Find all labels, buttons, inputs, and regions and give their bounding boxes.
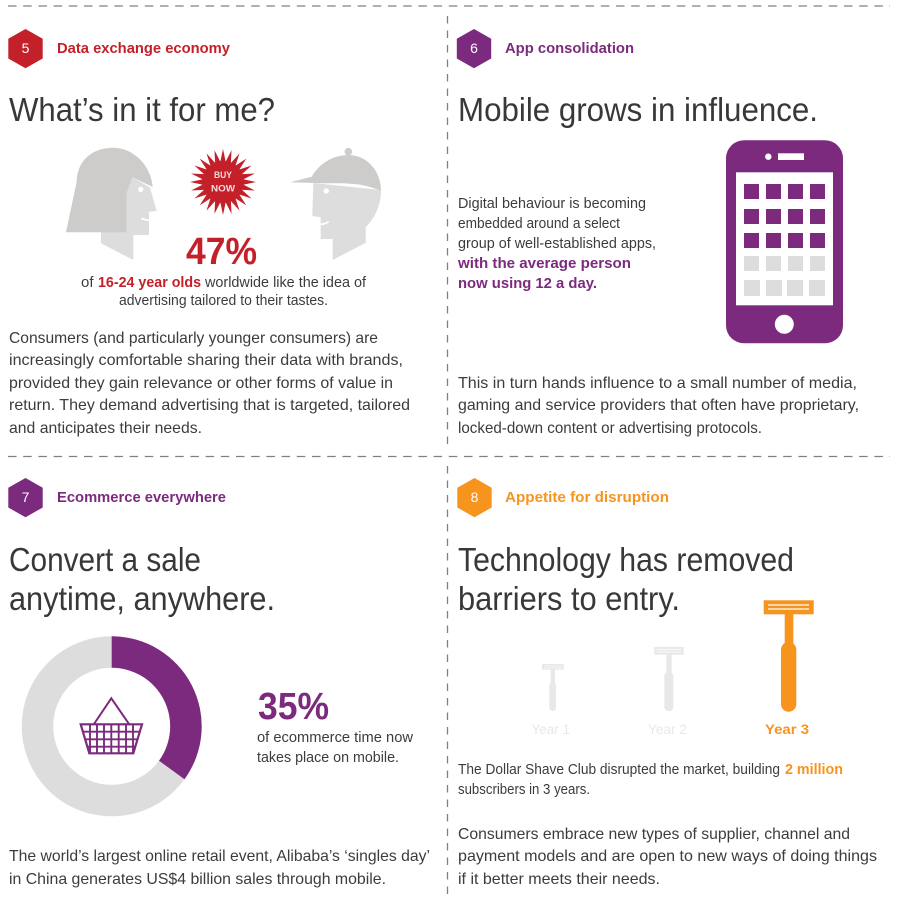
heading: technology has removed barriers: Technology has removed (458, 541, 794, 578)
panel: app consolidation (457, 29, 859, 437)
icon: razor year 2 (654, 647, 684, 711)
text block: alibaba singles day (9, 848, 430, 888)
caption: ecommerce time: of ecommerce time now (257, 729, 413, 746)
text block: dollar shave club: subscribers in 3 years. (458, 781, 590, 798)
icon: shopping basket (81, 698, 142, 753)
icon: hexagon number 7 (8, 478, 43, 517)
text block: consumers: Consumers (and particularly younger consumers) are (9, 330, 378, 347)
panel label: ecommerce everywhere: Ecommerce everywhere (57, 490, 226, 506)
text block: alibaba singles day: in China generates US$4 billion sales through mobile. (9, 871, 386, 888)
text block: dollar shave club (458, 761, 843, 798)
icon: buy now starburst: NOW (211, 184, 235, 194)
heading: mobile grows in influence: Mobile grows in influence. (458, 91, 818, 128)
statistic: 47%: 47% (186, 231, 257, 273)
text block: new models: if it better meets their needs. (458, 871, 660, 888)
text block: new models: Consumers embrace new types of supplier, channel and (458, 826, 850, 843)
icon: razor year 3 (764, 600, 814, 712)
text block: consumers: and anticipates their needs. (9, 420, 202, 437)
caption: 16-24 year olds: advertising tailored to their tastes. (119, 292, 328, 309)
label: year 2: Year 2 (648, 721, 687, 737)
text block: new models: payment models and are open to new ways of doing things (458, 848, 877, 865)
panel: data exchange economy (8, 29, 410, 437)
caption: ecommerce time (257, 729, 413, 766)
text block: digital behaviour: embedded around a select (458, 215, 621, 232)
panel label: app consolidation: App consolidation (505, 41, 634, 57)
icon: hexagon number 7: 7 (22, 489, 30, 505)
text block: influence: gaming and service providers that often have proprietary, (458, 397, 859, 414)
heading: convert a sale: anytime, anywhere. (9, 580, 275, 617)
heading: technology has removed barriers: barriers to entry. (458, 580, 680, 617)
caption: 16-24 year olds (81, 274, 367, 309)
chart: donut 35% (37, 636, 202, 801)
text block: digital behaviour: with the average person (457, 255, 631, 272)
heading: convert a sale (9, 541, 275, 617)
icon: hexagon number 6: 6 (470, 40, 478, 56)
panel label: data exchange economy: Data exchange economy (57, 41, 230, 57)
icon: hexagon number 5 (8, 29, 43, 68)
panel: ecommerce everywhere (8, 478, 430, 888)
text block: influence (458, 375, 859, 437)
panel label: appetite for disruption: Appetite for disruption (505, 490, 669, 506)
caption: 16-24 year olds: of (81, 274, 94, 291)
text block: consumers: increasingly comfortable sharing their data with brands, (9, 352, 403, 369)
panel: appetite for disruption (457, 478, 877, 888)
caption: 16-24 year olds: worldwide like the idea of (204, 274, 367, 291)
text block: influence: This in turn hands influence to a small number of media, (458, 375, 857, 392)
icon: razor year 1 (542, 664, 564, 711)
icon: hexagon number 8: 8 (471, 489, 479, 505)
icon: hexagon number 6 (457, 29, 491, 68)
statistic: 35%: 35% (258, 686, 329, 728)
text block: consumers (9, 330, 410, 437)
icon: woman head (66, 148, 157, 260)
icon: smartphone (726, 140, 843, 343)
label: year 1: Year 1 (532, 721, 570, 737)
text block: consumers: return. They demand advertising that is targeted, tailored (9, 397, 410, 414)
text block: consumers: provided they gain relevance or other forms of value in (9, 375, 393, 392)
text block: digital behaviour: now using 12 a day. (458, 275, 597, 292)
text block: alibaba singles day: The world’s largest online retail event, Alibaba’s ‘singles day’ (9, 848, 430, 865)
label: year 3: Year 3 (765, 721, 809, 737)
text block: dollar shave club: The Dollar Shave Club disrupted the market, building (458, 761, 780, 778)
icon: buy now starburst (189, 148, 257, 216)
caption: 16-24 year olds: 16-24 year olds (98, 274, 201, 291)
icon: hexagon number 8 (457, 478, 492, 517)
text block: digital behaviour: group of well-established apps, (458, 235, 656, 252)
text block: digital behaviour: Digital behaviour is becoming (458, 195, 646, 212)
icon: man head with cap (290, 148, 381, 260)
text block: digital behaviour (457, 195, 656, 292)
icon: buy now starburst: BUY (214, 170, 233, 181)
heading: what's in it for me: What’s in it for me? (9, 91, 275, 128)
text block: dollar shave club: 2 million (785, 761, 843, 778)
heading: technology has removed barriers (458, 541, 794, 617)
caption: ecommerce time: takes place on mobile. (257, 749, 399, 766)
text block: new models (458, 826, 877, 888)
heading: convert a sale: Convert a sale (9, 541, 201, 578)
text block: influence: locked-down content or advertising protocols. (458, 420, 762, 437)
icon: hexagon number 5: 5 (22, 40, 30, 56)
